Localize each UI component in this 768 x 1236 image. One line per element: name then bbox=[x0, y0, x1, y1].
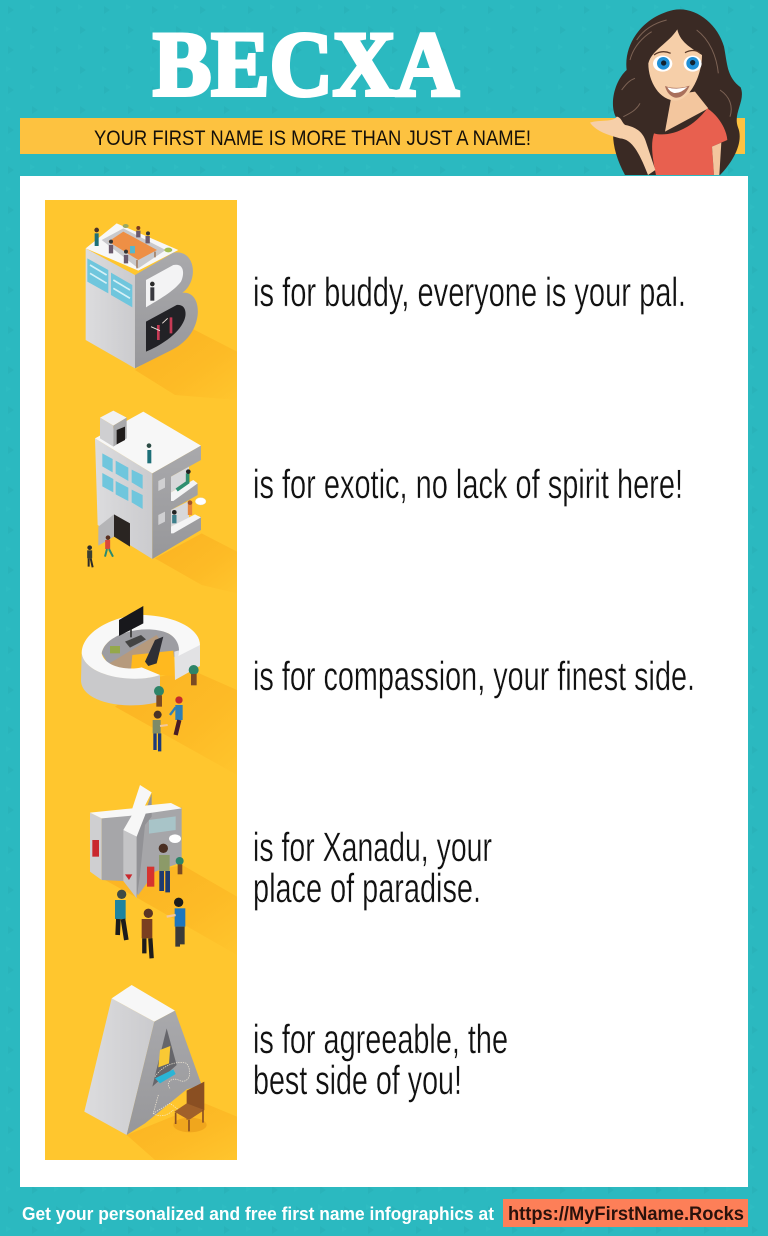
letter panel bbox=[45, 200, 237, 1160]
text: X line bbox=[253, 824, 492, 911]
letter A illustration bbox=[84, 985, 237, 1160]
footer link: https://MyFirstName.Rocks bbox=[508, 1204, 744, 1225]
letter X illustration bbox=[90, 785, 237, 958]
text: X line: place of paradise. bbox=[253, 865, 481, 911]
letter C illustration bbox=[81, 606, 237, 775]
title: BECXA bbox=[153, 13, 459, 115]
banner bbox=[20, 118, 745, 154]
text: A line bbox=[253, 1016, 508, 1103]
text: A line: is for agreeable, the bbox=[253, 1016, 508, 1062]
text: X line: is for Xanadu, your bbox=[253, 824, 492, 870]
white panel bbox=[20, 176, 748, 1187]
footer text: Get your personalized and free first name infographics at bbox=[22, 1204, 494, 1224]
banner text: YOUR FIRST NAME IS MORE THAN JUST A NAME! bbox=[94, 127, 531, 150]
text: A line: best side of you! bbox=[253, 1057, 462, 1103]
letter B illustration bbox=[86, 223, 237, 400]
letter E illustration bbox=[87, 411, 237, 593]
character: woman presenting bbox=[590, 9, 742, 175]
